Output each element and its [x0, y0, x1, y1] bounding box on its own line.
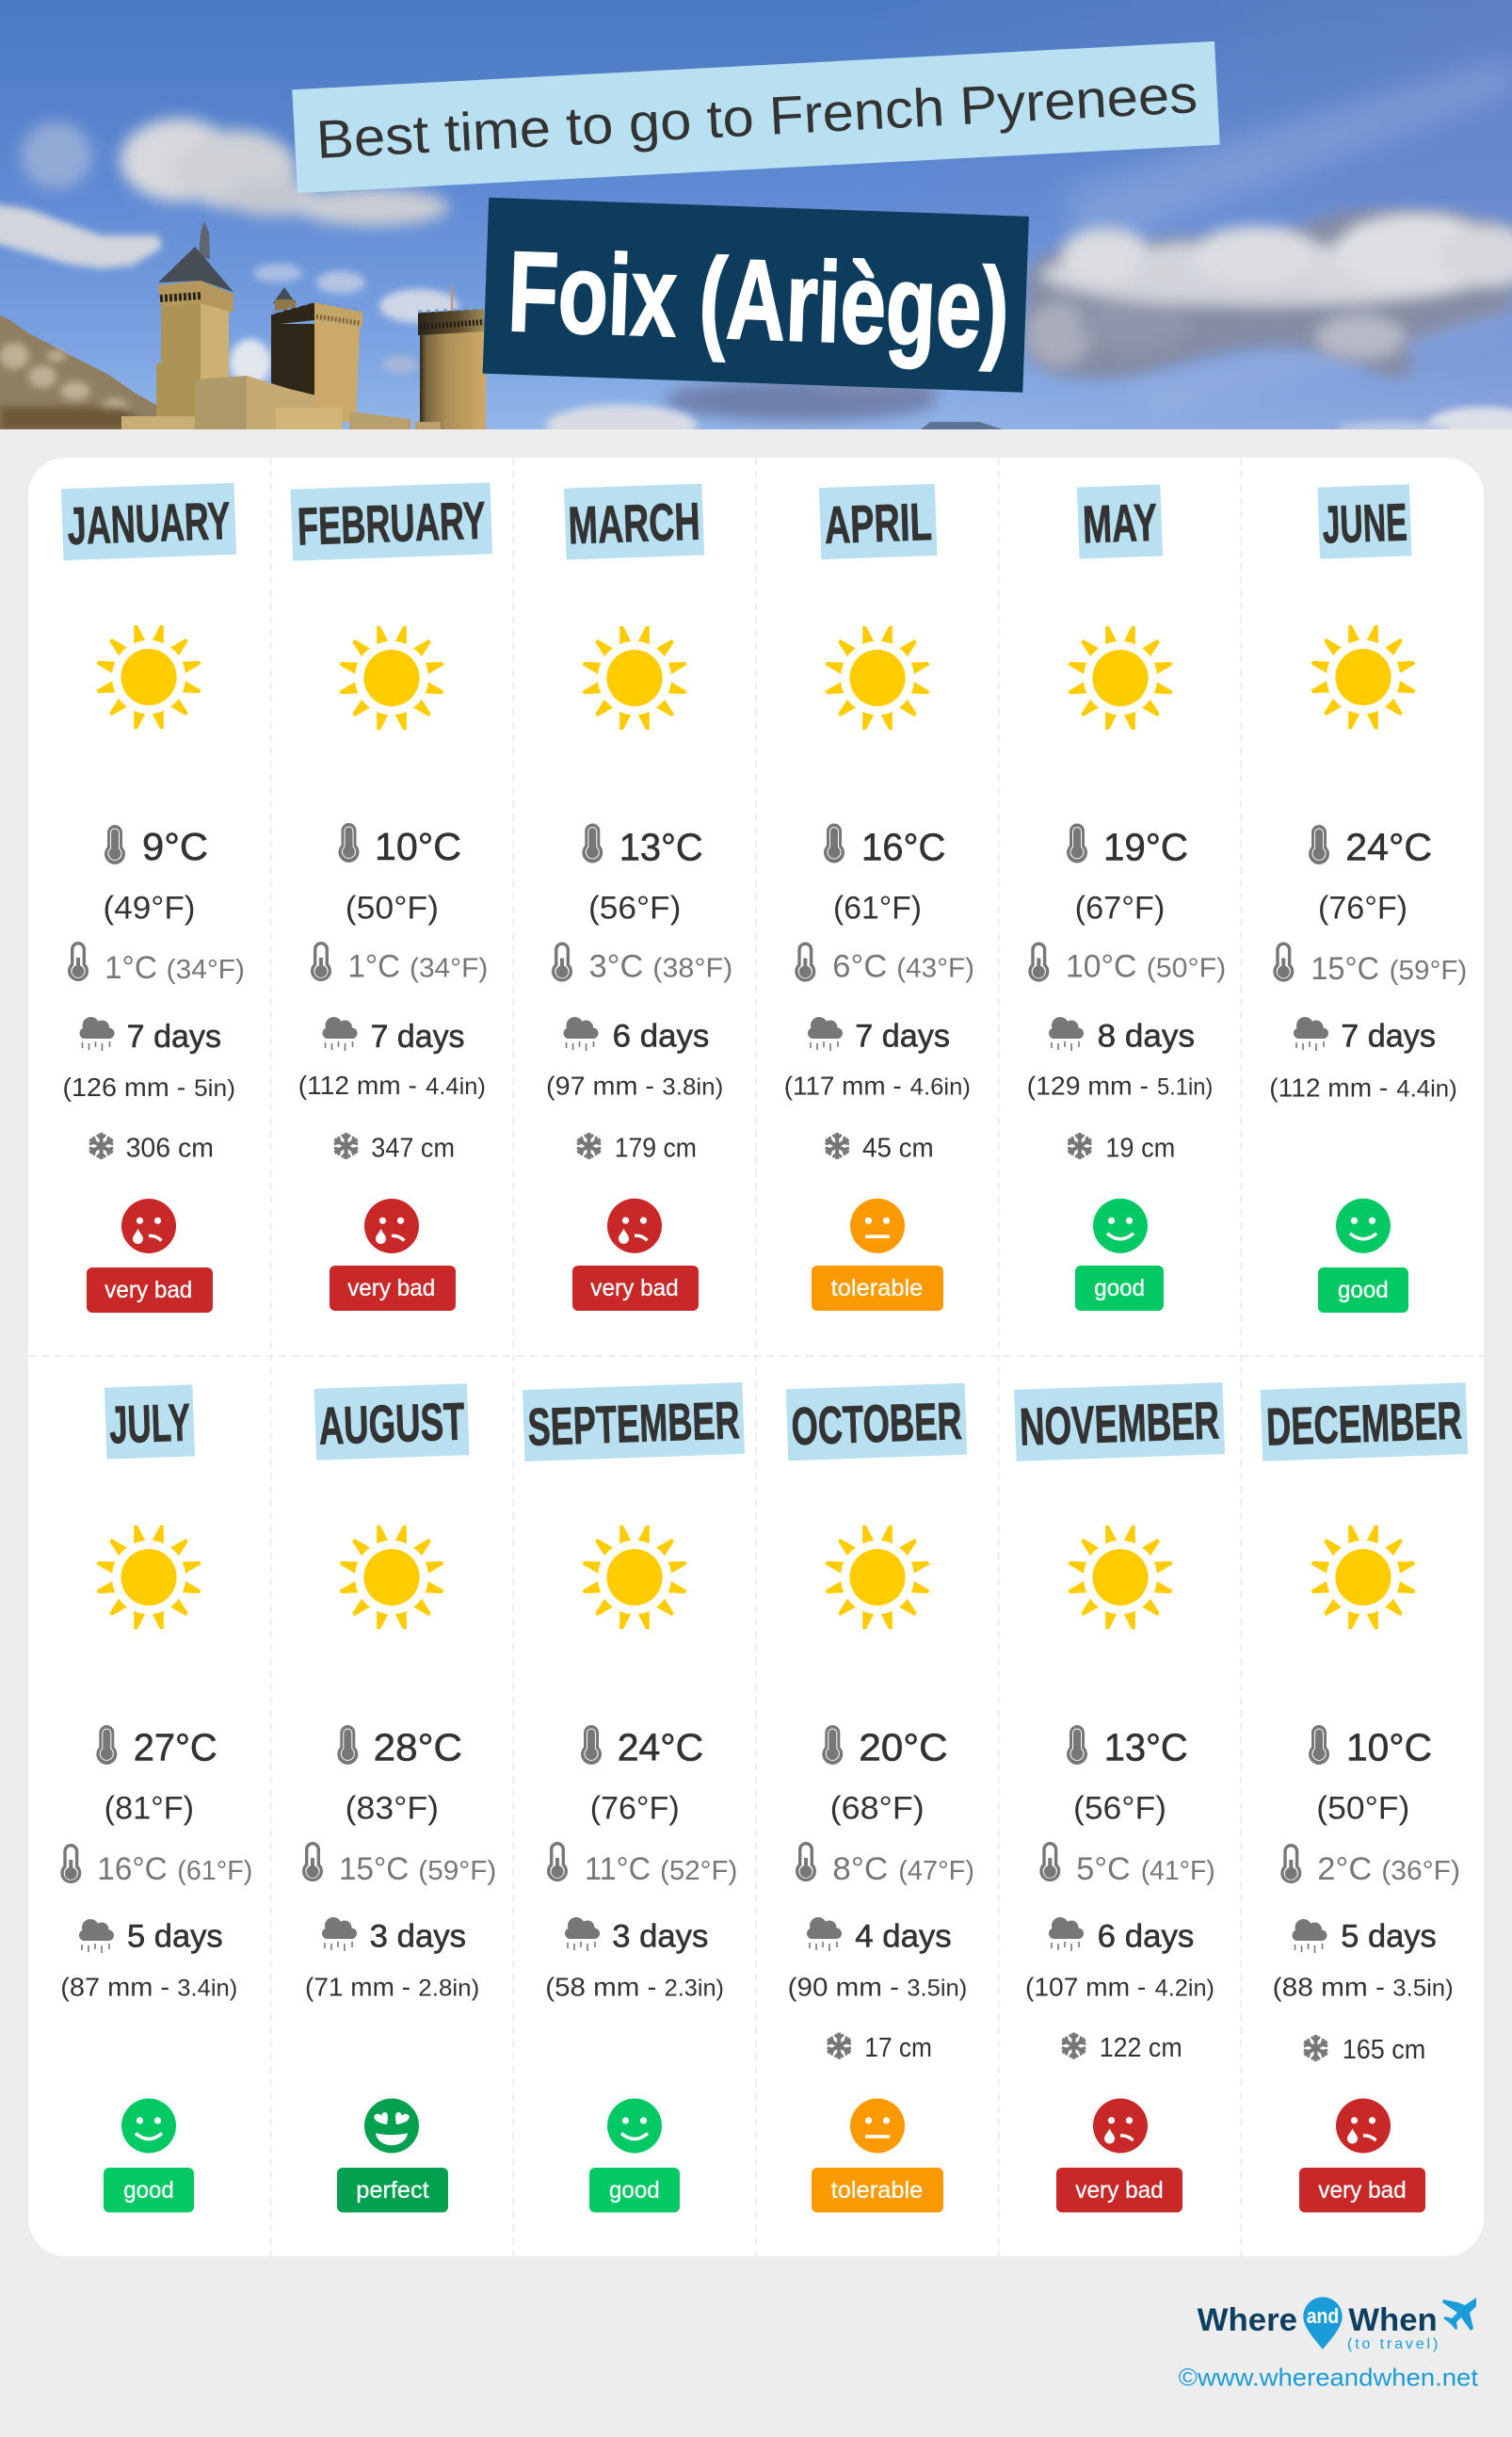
rainfall: 3 days — [612, 1918, 708, 1954]
low temperature: (59°F) — [1390, 956, 1467, 986]
high temperature: (50°F) — [1316, 1790, 1409, 1826]
low temperature: 8°C — [832, 1851, 888, 1887]
rating: very bad: very bad — [105, 1277, 192, 1303]
logo: Where and When (to travel): (to travel) — [1347, 2336, 1438, 2352]
rainfall: 5 days — [127, 1918, 223, 1954]
rainfall: 3.4in) — [177, 1976, 237, 2002]
rating: very bad: very bad — [1075, 2177, 1164, 2203]
low temperature — [1282, 1846, 1460, 1887]
high temperature: 9°C — [142, 825, 208, 868]
heading: February — [291, 482, 492, 561]
rating: tolerable — [812, 1199, 943, 1311]
column: January — [61, 483, 245, 1313]
hillside — [0, 315, 165, 429]
rating: good: good — [1338, 1277, 1389, 1303]
rainfall: (112 mm - — [1269, 1073, 1388, 1102]
high temperature — [96, 1725, 217, 1826]
rainfall: 5.1in) — [1157, 1073, 1213, 1100]
icon: map pin — [1303, 2297, 1343, 2349]
snowfall — [1302, 2035, 1425, 2065]
rainfall: 2.8in) — [418, 1976, 479, 2002]
round tower — [418, 285, 486, 429]
rainfall: (129 mm - — [1027, 1071, 1149, 1100]
low temperature: 1°C — [348, 949, 400, 985]
column: December — [1261, 1382, 1468, 2213]
rating: very bad: very bad — [347, 1275, 435, 1301]
snowfall: 122 cm — [1100, 2033, 1182, 2063]
high temperature: 28°C — [374, 1725, 462, 1768]
high temperature: (50°F) — [346, 890, 439, 926]
rating: very bad: very bad — [1318, 2177, 1407, 2203]
snowfall — [332, 1133, 455, 1164]
low temperature — [796, 944, 974, 984]
heading: August: AUGUST — [318, 1391, 466, 1456]
rainfall — [784, 1017, 971, 1100]
icon: sun — [339, 626, 444, 730]
low temperature: 1°C — [105, 950, 157, 986]
rainfall — [1273, 1918, 1454, 2002]
heading: March — [564, 483, 704, 560]
rainfall: 8 days — [1098, 1018, 1195, 1054]
rainfall — [1027, 1017, 1213, 1100]
rainfall — [1269, 1017, 1457, 1102]
low temperature — [70, 944, 245, 986]
logo: Where and When (to travel) — [1198, 2297, 1476, 2352]
rating: very bad — [1056, 2098, 1182, 2213]
rating: very bad — [1299, 2098, 1425, 2213]
icon: sun — [96, 625, 201, 729]
header title ribbon — [483, 198, 1029, 393]
icon: sun — [339, 1525, 444, 1629]
heading: January: JANUARY — [67, 491, 232, 556]
heading: October: OCTOBER — [791, 1391, 963, 1456]
high temperature: (56°F) — [588, 890, 681, 926]
website credit: ©www.whereandwhen.net — [1179, 2363, 1479, 2391]
snowfall: 179 cm — [615, 1134, 697, 1164]
rainfall — [305, 1917, 479, 2002]
icon: sun — [1068, 1525, 1173, 1629]
high temperature — [582, 823, 703, 926]
high temperature: (56°F) — [1073, 1790, 1166, 1826]
header subtitle ribbon — [292, 41, 1220, 193]
rainfall: 3.5in) — [1392, 1976, 1454, 2002]
header title ribbon: Foix (Ariège) — [507, 227, 1011, 372]
heading: July — [105, 1384, 195, 1460]
low temperature: 2°C — [1317, 1851, 1372, 1887]
high temperature — [581, 1725, 703, 1826]
low temperature: 10°C — [1066, 948, 1136, 984]
column: April — [784, 484, 974, 1311]
low temperature: (34°F) — [410, 953, 488, 983]
rainfall: 7 days — [1341, 1018, 1436, 1054]
heading: July: JULY — [108, 1393, 191, 1454]
low temperature: (36°F) — [1381, 1856, 1460, 1886]
castle walls — [121, 376, 441, 429]
rainfall: 4.4in) — [1396, 1075, 1457, 1102]
high temperature: 13°C — [619, 825, 703, 868]
rainfall: 3.8in) — [662, 1073, 723, 1100]
upper left cloud — [21, 119, 449, 226]
high temperature: (76°F) — [1318, 890, 1407, 926]
rainfall: 4.2in) — [1155, 1976, 1214, 2002]
low temperature — [304, 1844, 496, 1887]
header photo: castle of Foix against a cloudy sky — [0, 0, 1512, 446]
rainfall — [62, 1017, 235, 1102]
low temperature — [313, 944, 488, 985]
rainfall — [298, 1017, 486, 1100]
low temperature: 3°C — [589, 948, 643, 984]
rainfall — [788, 1917, 967, 2002]
logo: Where and When (to travel): and — [1307, 2304, 1339, 2328]
rainfall: 4.4in) — [426, 1073, 486, 1100]
heading: March: MARCH — [567, 492, 701, 555]
rating: good: good — [609, 2177, 660, 2203]
rainfall: 3.5in) — [907, 1976, 967, 2002]
high temperature: 27°C — [134, 1725, 217, 1768]
column: November — [1014, 1382, 1225, 2213]
rating: tolerable: tolerable — [831, 1275, 923, 1301]
high temperature: 16°C — [861, 825, 945, 868]
small clouds near the castle — [230, 264, 458, 386]
heading: May — [1077, 484, 1163, 559]
icon: sun — [1311, 1525, 1416, 1629]
rating: tolerable — [812, 2098, 943, 2213]
rainfall: 7 days — [371, 1019, 465, 1055]
high temperature: (49°F) — [104, 890, 196, 926]
high temperature: (67°F) — [1075, 890, 1165, 926]
snowfall: 17 cm — [864, 2033, 932, 2063]
high temperature: (61°F) — [833, 890, 922, 926]
column and row dividers — [28, 458, 1484, 2256]
rainfall: (117 mm - — [784, 1071, 902, 1100]
rating: good — [104, 2098, 194, 2213]
heading: February: FEBRUARY — [297, 491, 487, 556]
heading: April — [819, 484, 937, 559]
rainfall: (126 mm - — [62, 1073, 185, 1102]
high temperature: 24°C — [1345, 825, 1432, 868]
snowfall — [824, 1133, 934, 1164]
rating: perfect: perfect — [356, 2177, 429, 2203]
rainfall: (97 mm - — [546, 1071, 654, 1100]
rainfall — [60, 1918, 237, 2002]
snowfall: 19 cm — [1105, 1134, 1175, 1164]
icon: airplane — [1442, 2298, 1476, 2331]
column: July — [60, 1384, 252, 2213]
rainfall: 6 days — [1098, 1918, 1194, 1954]
high temperature: 10°C — [375, 825, 461, 868]
high temperature — [337, 1725, 462, 1826]
low temperature: (41°F) — [1141, 1856, 1215, 1886]
low temperature — [797, 1844, 974, 1887]
icon: sun — [96, 1525, 201, 1629]
snowfall: 306 cm — [126, 1134, 214, 1164]
high temperature: (68°F) — [830, 1790, 925, 1826]
low temperature — [1030, 944, 1226, 984]
low temperature: 16°C — [97, 1851, 168, 1887]
heading: May: MAY — [1082, 492, 1158, 554]
rainfall — [546, 1017, 723, 1100]
heading: September — [523, 1382, 745, 1461]
low temperature: (50°F) — [1147, 953, 1226, 983]
low temperature: (34°F) — [167, 955, 245, 985]
low temperature: 15°C — [1311, 951, 1379, 987]
tower with slate roof — [156, 221, 233, 429]
lower clouds — [664, 372, 941, 421]
icon: sun — [1068, 626, 1173, 730]
high temperature — [824, 823, 945, 926]
rainfall: 5in) — [194, 1075, 235, 1102]
wispy high clouds — [1064, 56, 1512, 414]
header subtitle ribbon: Best time to go to French Pyrenees — [314, 64, 1198, 170]
rainfall — [545, 1917, 724, 2002]
low temperature: (59°F) — [418, 1856, 496, 1886]
heading: November: NOVEMBER — [1019, 1390, 1220, 1457]
white card panel — [28, 458, 1484, 2256]
high temperature — [339, 823, 461, 926]
dark keep tower — [271, 287, 362, 429]
high temperature: 20°C — [859, 1725, 948, 1768]
low temperature: (38°F) — [652, 953, 732, 983]
rainfall: (58 mm - — [545, 1973, 656, 2002]
low temperature: 5°C — [1076, 1851, 1131, 1887]
icon: sun — [825, 1525, 930, 1629]
column: June — [1269, 484, 1467, 1313]
big right cloud — [1026, 209, 1512, 379]
snowfall — [88, 1133, 214, 1164]
rainfall: (88 mm - — [1273, 1973, 1385, 2002]
rainfall: 5 days — [1341, 1918, 1437, 1954]
rating: good — [1318, 1199, 1408, 1313]
low temperature — [554, 944, 732, 984]
rating: very bad — [572, 1199, 699, 1311]
icon: sun — [1311, 625, 1416, 729]
heading: June: JUNE — [1321, 492, 1408, 555]
rainfall: 4.6in) — [910, 1073, 971, 1100]
low temperature: 6°C — [832, 948, 887, 984]
low temperature: (47°F) — [898, 1856, 974, 1886]
icon: sun — [825, 626, 930, 730]
low temperature: (52°F) — [660, 1856, 737, 1886]
snowfall — [1060, 2033, 1182, 2063]
rating: very bad: very bad — [590, 1275, 679, 1301]
rainfall: (87 mm - — [60, 1973, 169, 2002]
rating: good — [589, 2098, 680, 2213]
rating: good — [1075, 1199, 1164, 1311]
high temperature: (81°F) — [105, 1790, 194, 1826]
icon: sun — [582, 626, 687, 730]
column: August — [304, 1383, 496, 2213]
rating: good: good — [123, 2177, 174, 2203]
column: September — [523, 1382, 745, 2213]
high temperature — [1309, 825, 1432, 926]
low temperature — [1275, 944, 1467, 987]
snowfall: 45 cm — [862, 1134, 934, 1164]
column: February — [291, 482, 492, 1311]
left band cloud — [0, 203, 162, 268]
low temperature — [62, 1846, 252, 1887]
rating: very bad — [330, 1199, 456, 1311]
rainfall: (112 mm - — [298, 1071, 417, 1100]
rainfall: 6 days — [613, 1018, 709, 1054]
rating: tolerable: tolerable — [831, 2177, 923, 2203]
column: March — [546, 483, 732, 1311]
high temperature: 24°C — [618, 1725, 703, 1768]
snowfall: 165 cm — [1343, 2035, 1425, 2065]
high temperature: 19°C — [1103, 825, 1188, 868]
snowfall — [1066, 1133, 1175, 1164]
high temperature — [1067, 1725, 1188, 1826]
low temperature — [549, 1844, 737, 1887]
logo: Where and When (to travel): When — [1348, 2302, 1438, 2338]
high temperature — [822, 1725, 948, 1826]
low temperature: (43°F) — [896, 953, 974, 983]
high temperature — [104, 825, 208, 926]
rainfall: (90 mm - — [788, 1973, 899, 2002]
rating: very bad — [87, 1199, 213, 1313]
heading: October — [786, 1383, 967, 1461]
rainfall: (71 mm - — [305, 1973, 410, 2002]
rainfall: 3 days — [370, 1918, 466, 1954]
rainfall: 4 days — [855, 1918, 952, 1954]
rainfall: 2.3in) — [665, 1976, 724, 2002]
rainfall: 7 days — [855, 1018, 950, 1054]
column: October — [786, 1383, 974, 2213]
rating: perfect — [337, 2098, 448, 2213]
distant mountain — [921, 422, 1003, 429]
low temperature — [1041, 1844, 1215, 1887]
icon: sun — [582, 1525, 687, 1629]
high temperature: 13°C — [1104, 1725, 1188, 1768]
rainfall: (107 mm - — [1025, 1973, 1146, 2002]
rainfall — [1025, 1917, 1214, 2002]
low temperature: 15°C — [339, 1851, 409, 1887]
heading: April: APRIL — [824, 492, 933, 555]
logo: Where and When (to travel): Where — [1198, 2302, 1297, 2338]
heading: January — [61, 483, 236, 560]
low temperature: (61°F) — [177, 1856, 252, 1886]
high temperature: 10°C — [1346, 1725, 1432, 1768]
heading: November — [1014, 1382, 1225, 1461]
column: May — [1027, 484, 1226, 1311]
snowfall: 347 cm — [371, 1134, 455, 1164]
heading: September: SEPTEMBER — [527, 1390, 741, 1457]
high temperature — [1309, 1725, 1432, 1826]
snowfall — [826, 2033, 932, 2063]
high temperature — [1067, 823, 1188, 926]
rating: good: good — [1094, 1275, 1145, 1301]
heading: August — [314, 1383, 470, 1461]
high temperature: (83°F) — [346, 1790, 439, 1826]
heading: June — [1317, 484, 1411, 559]
low temperature: 11°C — [585, 1851, 651, 1887]
snowfall — [575, 1133, 697, 1164]
rainfall: 7 days — [127, 1019, 221, 1055]
high temperature: (76°F) — [590, 1790, 680, 1826]
